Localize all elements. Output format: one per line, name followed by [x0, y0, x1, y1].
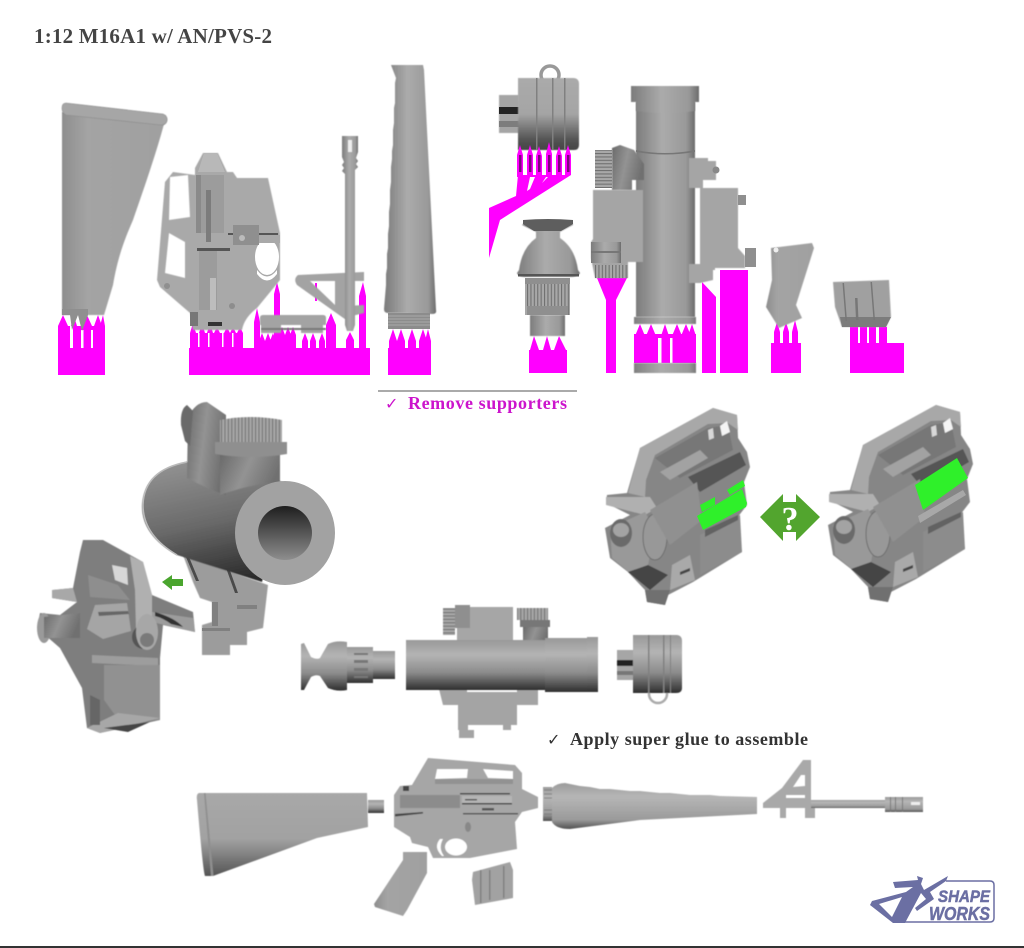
assembled scope side view: [301, 605, 682, 738]
icon: green double arrow with question mark: ?: [782, 501, 798, 538]
note: remove supporters: Remove supporters: [408, 393, 567, 413]
upper and lower receiver on supports: [157, 153, 370, 375]
eyepiece on supports: [517, 219, 580, 373]
note: apply super glue: Apply super glue to assemble: [570, 729, 808, 749]
receiver option with short forward assist highlighted: [605, 408, 750, 605]
logo wordmark: SHAPE: [938, 887, 991, 906]
scope bottom mount: [438, 685, 538, 738]
scope mount: [183, 555, 268, 655]
scope tube: [142, 462, 284, 582]
panel: printed parts with magenta supporters: [58, 65, 904, 375]
scope in perspective: [142, 402, 335, 655]
note: remove supporters: ✓: [385, 394, 398, 413]
green highlighted part: [697, 480, 747, 530]
arrow: fit scope onto receiver: [162, 575, 183, 590]
logo mark: [870, 876, 948, 923]
barrel with front sight: [260, 136, 364, 333]
handguard on supports: [384, 65, 436, 375]
divider rule above note: [378, 390, 577, 392]
title: 1:12 M16A1 w/ AN/PVS-2: [34, 24, 272, 48]
rifle magazine: [472, 862, 513, 905]
eyepiece: [301, 641, 395, 691]
rifle handguard: [543, 783, 757, 829]
logo frame: [903, 881, 994, 922]
receiver option with long ejection cover highlighted: [828, 405, 973, 602]
rifle pistol grip: [374, 852, 427, 916]
icon: green double arrow with question mark: [760, 494, 820, 541]
logo: JS Shape Works: [870, 876, 994, 924]
scope front face: [235, 481, 335, 585]
rifle stock: [197, 793, 384, 876]
note: apply super glue: ✓: [547, 730, 560, 749]
side rod: [918, 490, 966, 523]
stock on supports: [58, 103, 167, 375]
rifle barrel with front sight: [763, 760, 923, 818]
scope top controls: [443, 605, 550, 647]
bottom rule: [0, 946, 1024, 948]
assembled rifle exploded view: [197, 758, 923, 916]
green highlighted part: [915, 458, 968, 510]
receiver with carry handle, front view: [37, 540, 195, 733]
end cap with ring: [617, 635, 682, 703]
scope tube: [406, 637, 598, 692]
logo: JS Shape Works: WORKS: [929, 904, 990, 924]
pistol grip on supports: [766, 243, 814, 373]
rear cap on supports: [489, 66, 579, 258]
rifle receiver: [394, 758, 538, 858]
magazine on supports: [833, 280, 904, 373]
night vision scope body on supports: [591, 86, 756, 373]
scope top turret: [181, 402, 287, 495]
